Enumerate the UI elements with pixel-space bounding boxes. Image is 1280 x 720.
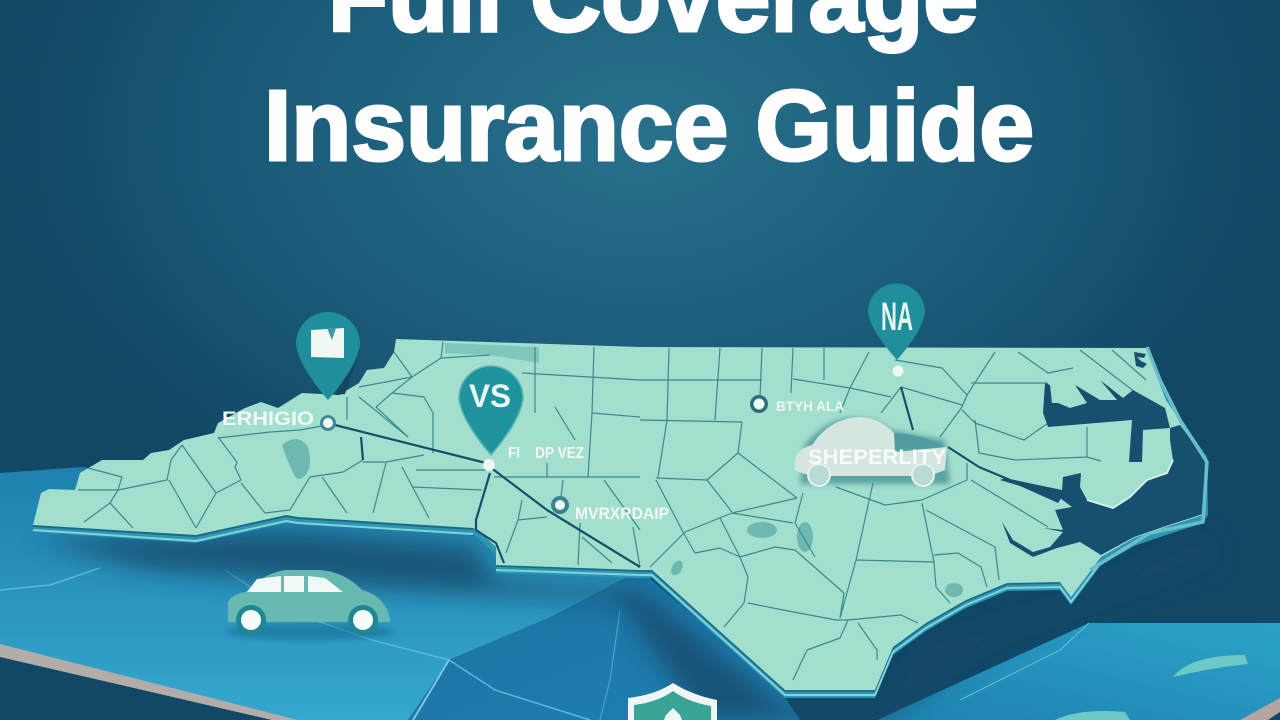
shield icon xyxy=(628,683,717,720)
city marker: centre: FI DP VEZ xyxy=(508,445,584,462)
pin: document xyxy=(296,312,360,400)
pin: VS: VS xyxy=(469,378,511,414)
Currituck inlet mark xyxy=(1134,352,1147,368)
pin: VS xyxy=(459,366,523,455)
map land xyxy=(33,339,1205,690)
city marker: south xyxy=(551,496,669,523)
city marker: west xyxy=(222,409,336,431)
map car badge: SHEPERLITY xyxy=(808,446,946,469)
title: Insurance Guide xyxy=(264,70,1034,182)
city marker: east xyxy=(750,395,844,414)
coastal sounds xyxy=(1000,352,1205,557)
city marker: centre xyxy=(483,445,584,471)
map: North Carolina xyxy=(33,339,1208,698)
map edge xyxy=(33,348,1208,698)
ground plane: left xyxy=(0,467,800,720)
city marker: west: ERHIGIO xyxy=(222,409,314,430)
highway lines xyxy=(327,387,1010,567)
city marker: north xyxy=(892,366,904,376)
pin: NA: NA xyxy=(881,295,913,339)
ground plane: right xyxy=(877,623,1280,720)
city marker: south: MVRXRDAIP xyxy=(575,504,669,523)
map shadow xyxy=(33,530,1220,720)
Pamlico Sound xyxy=(1000,425,1205,557)
car illustration xyxy=(225,570,395,640)
Albemarle Sound xyxy=(1043,380,1170,462)
road strips xyxy=(0,644,1280,720)
county lines xyxy=(78,342,1146,680)
title xyxy=(264,0,1034,182)
map car badge xyxy=(795,417,950,486)
pin: NA xyxy=(868,284,925,360)
city marker: east: BTYH ALA xyxy=(776,398,844,414)
map water patches xyxy=(282,343,963,597)
